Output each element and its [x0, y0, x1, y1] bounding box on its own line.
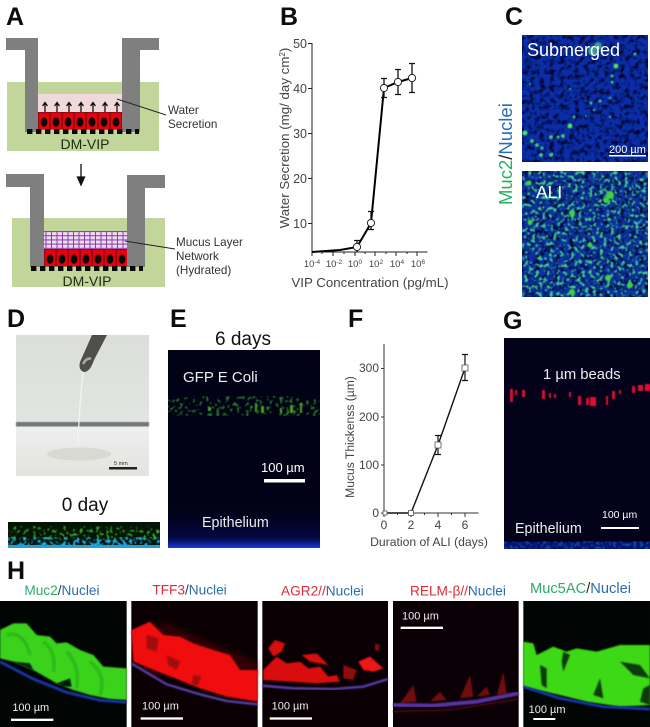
micrograph: 6 days: Epithelium [202, 515, 269, 531]
data series with error bars [383, 354, 468, 516]
micrograph: RELM-β: RELM-β//Nuclei [410, 584, 506, 599]
x tick labels [304, 259, 425, 270]
label: 0 day: 0 day [62, 495, 109, 516]
y tick labels: 100 [359, 458, 379, 472]
x tick labels: 6 [421, 259, 425, 266]
x tick labels: 4 [400, 259, 404, 266]
y tick labels: 20 [293, 172, 307, 186]
panel C: Muc2/Nuclei micrographs [495, 3, 648, 297]
micrograph: RELM-β [393, 584, 519, 727]
y axis title: Water Secretion (mg/ day cm [277, 57, 292, 228]
x tick labels: 6 [462, 518, 469, 532]
x tick labels: 10 [411, 259, 421, 270]
x tick labels: 0 [381, 518, 388, 532]
data series with error bars [312, 63, 416, 252]
micrograph: 0 day [8, 522, 160, 548]
micrograph: Muc2: Muc2/Nuclei [24, 583, 99, 598]
micrograph: beads: Epithelium [515, 521, 582, 537]
x tick labels: 10 [369, 259, 379, 270]
micrograph: submerged [522, 35, 648, 162]
x tick labels: 4 [435, 518, 442, 532]
micrograph: beads: 100 µm [602, 509, 637, 521]
panel letter A: A [6, 3, 24, 31]
micrograph: Muc2: 100 µm [12, 702, 49, 714]
axes [381, 344, 478, 517]
callout: mucus layer network: (Hydrated) [176, 264, 231, 277]
y tick labels [293, 37, 307, 231]
micrograph: beads [504, 338, 650, 549]
micrograph: Muc5AC: Muc5AC/Nuclei [530, 581, 631, 597]
y axis title: ) [277, 48, 292, 52]
panel D: hydrogel photo and 0 day micrograph [7, 305, 160, 548]
x tick labels [381, 518, 469, 532]
y axis title: 2 [278, 52, 287, 57]
panel letter H: H [7, 557, 25, 585]
arrow: down [78, 164, 84, 185]
micrograph: AGR2 [262, 584, 388, 727]
callout: water secretion: Water [168, 104, 199, 117]
x axis title: Duration of ALI (days) [370, 535, 488, 549]
micrograph: 6 days [168, 350, 320, 548]
diagram: water secretion transwell [6, 38, 159, 152]
diagram: mucus layer transwell: DM-VIP [62, 273, 112, 289]
callout: water secretion: Secretion [168, 118, 217, 131]
y tick labels: 40 [293, 82, 307, 96]
micrograph: AGR2: AGR2//Nuclei [281, 584, 364, 599]
x tick labels: 10 [304, 259, 314, 270]
panel letter D: D [7, 305, 25, 333]
x tick labels: 2 [379, 259, 383, 266]
micrograph: TFF3 [131, 582, 258, 727]
x tick labels: -4 [314, 259, 321, 266]
scale bar: 200 µm: 200 µm [609, 144, 646, 156]
micrograph: TFF3: 100 µm [142, 700, 179, 712]
panel F: mucus thickness chart [343, 305, 488, 549]
x tick labels: 2 [408, 518, 415, 532]
y tick labels: 300 [359, 361, 379, 375]
x tick labels: -2 [336, 259, 343, 266]
y axis title: Mucus Thickenss (µm) [343, 376, 357, 498]
micrograph: 6 days: 100 µm [261, 460, 305, 475]
panel letter G: G [503, 307, 522, 335]
micrograph: Muc5AC: 100 µm [529, 704, 566, 716]
micrograph: AGR2: 100 µm [272, 700, 309, 712]
y tick labels [359, 361, 379, 520]
y tick labels: 50 [293, 37, 307, 51]
y tick labels: 30 [293, 127, 307, 141]
panel B: water secretion dose-response chart [277, 3, 449, 290]
y tick labels: 10 [293, 217, 307, 231]
x tick labels: 10 [390, 259, 400, 270]
x tick labels: 0 [358, 259, 362, 266]
axes [308, 43, 428, 256]
photo: mucus string [16, 335, 149, 476]
panel H: tissue staining row [0, 557, 650, 727]
label: 6 days: 6 days [215, 329, 271, 350]
diagram: water secretion transwell: DM-VIP [60, 136, 110, 152]
x axis title: VIP Concentration (pg/mL) [291, 275, 449, 290]
micrograph: ALI [522, 171, 648, 297]
y tick labels: 0 [372, 506, 379, 520]
x tick labels: 10 [348, 259, 358, 270]
micrograph: Muc2 [0, 583, 127, 727]
callout: water secretion [117, 99, 217, 131]
diagram: mucus layer transwell [6, 174, 165, 289]
micrograph: Muc5AC [523, 581, 650, 727]
callout: mucus layer network: Network [176, 250, 219, 263]
panel G: 1 µm beads micrograph [503, 307, 650, 549]
micrograph: TFF3: TFF3/Nuclei [152, 582, 227, 597]
callout: mucus layer network [125, 236, 243, 277]
panel letter E: E [170, 305, 187, 333]
vertical label: Muc2/Nuclei [495, 103, 516, 205]
panel letter B: B [280, 3, 298, 31]
photo: mucus string: 5 mm [114, 461, 128, 467]
micrograph: 6 days: GFP E Coli [183, 369, 258, 386]
callout: mucus layer network: Mucus Layer [176, 236, 243, 249]
panel E: GFP E Coli micrograph [168, 305, 320, 548]
label: ALI: ALI [536, 182, 562, 202]
micrograph: beads: 1 µm beads [543, 367, 621, 383]
panel letter F: F [348, 305, 363, 333]
y tick labels: 200 [359, 410, 379, 424]
panel letter C: C [505, 3, 523, 31]
x tick labels: 10 [326, 259, 336, 270]
label: Submerged: Submerged [527, 40, 620, 60]
panel A: transwell diagrams [6, 3, 243, 289]
micrograph: RELM-β: 100 µm [402, 610, 439, 622]
